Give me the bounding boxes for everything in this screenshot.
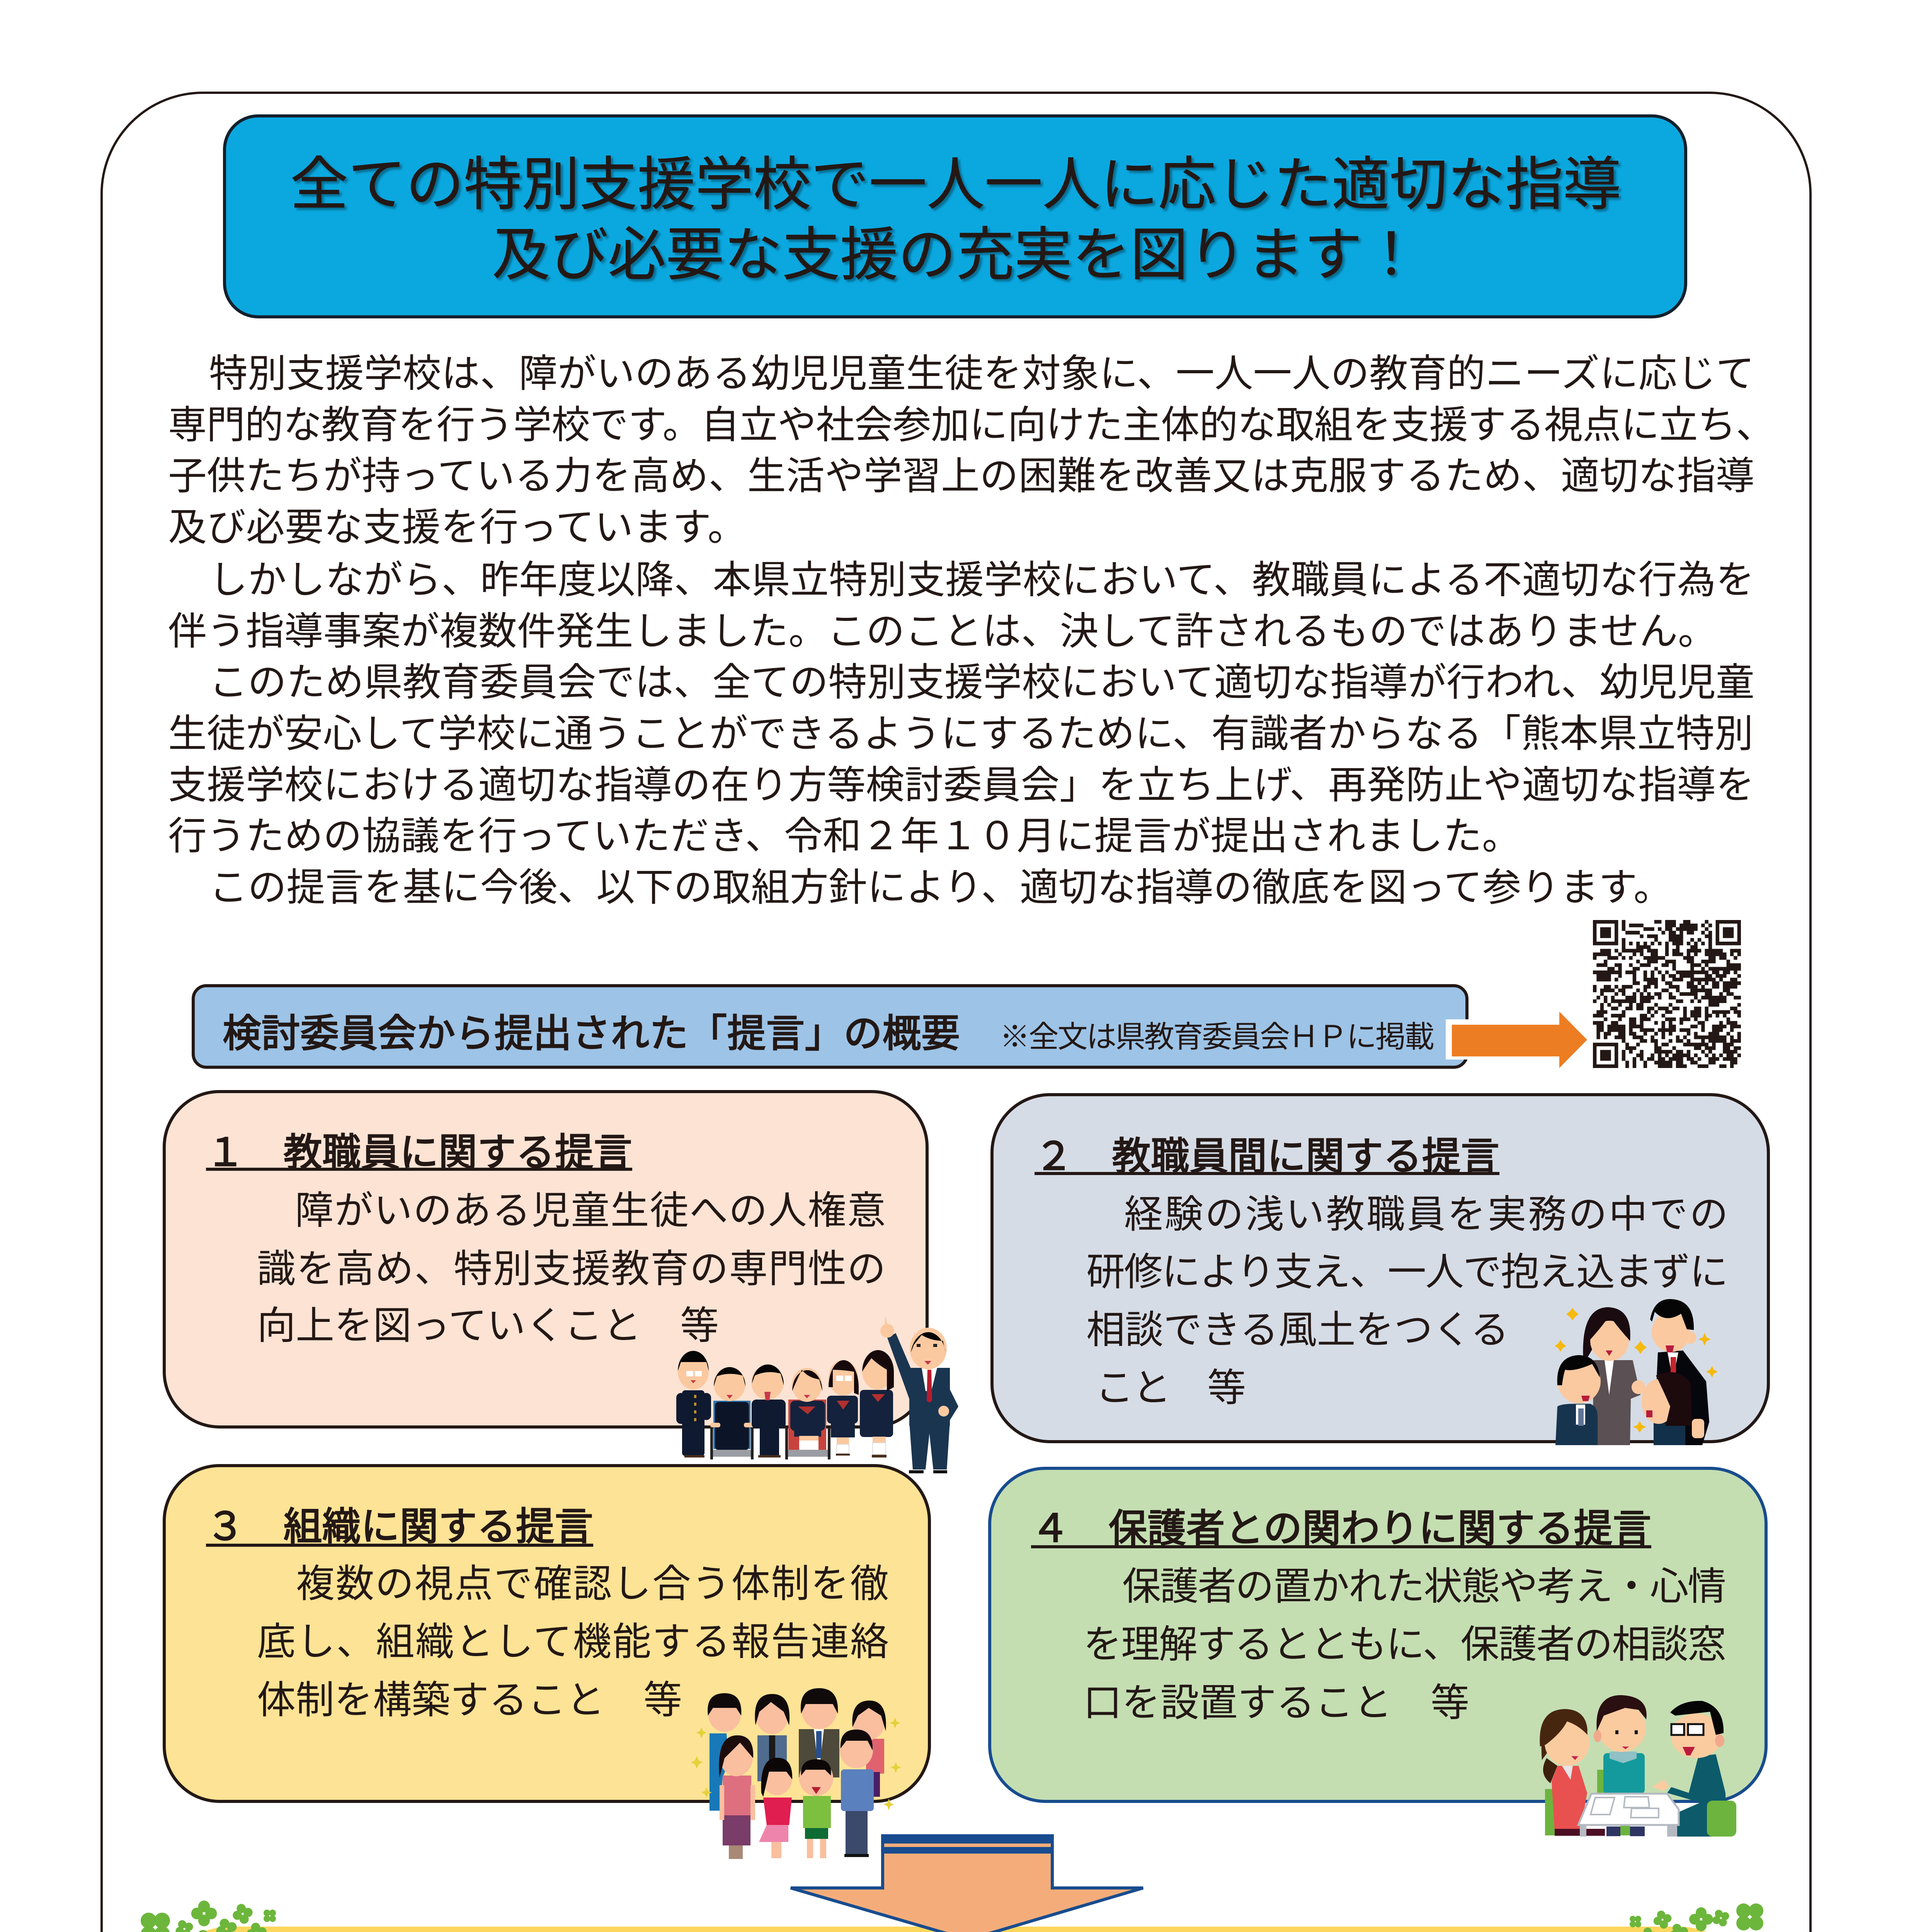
panel: proposal 1 staff	[164, 1092, 927, 1427]
intro text block: 子供たちが持っている力を高め、生活や学習上の困難を改善又は克服するため、適切な指導	[168, 454, 1754, 498]
intro text block	[168, 352, 1775, 909]
intro text block: しかしながら、昨年度以降、本県立特別支援学校において、教職員による不適切な行為を	[209, 558, 1754, 602]
panel: proposal 2 between staff: 研修により支え、一人で抱え込まずに	[1086, 1250, 1728, 1294]
panel: proposal 4 guardians: を理解するとともに、保護者の相談窓	[1083, 1623, 1726, 1666]
panel: proposal 4 guardians	[990, 1468, 1766, 1801]
intro text block: 行うための協議を行っていただき、令和２年１０月に提言が提出されました。	[168, 815, 1521, 858]
intro text block: 伴う指導事案が複数件発生しました。このことは、決して許されるものではありません。	[168, 610, 1717, 653]
QR code	[1593, 920, 1741, 1068]
icon: parent consultation	[1540, 1695, 1736, 1837]
panel: proposal 2 between staff: 相談できる風土をつくる	[1086, 1308, 1509, 1352]
panel: proposal 1 staff: 向上を図っていくこと 等	[257, 1304, 719, 1347]
panel: proposal 3 organization: ３ 組織に関する提言	[206, 1505, 593, 1548]
panel: proposal 4 guardians: ４ 保護者との関わりに関する提言	[1031, 1507, 1651, 1550]
icon: teachers talking	[1555, 1299, 1718, 1445]
panel: proposal 1 staff: １ 教職員に関する提言	[206, 1131, 632, 1174]
panel: proposal 4 guardians: 口を設置すること 等	[1083, 1681, 1469, 1725]
panel: proposal 1 staff: 識を高め、特別支援教育の専門性の	[257, 1247, 886, 1291]
panel: action policy	[150, 1927, 1760, 1932]
intro text block: 生徒が安心して学校に通うことができるようにするために、有識者からなる「熊本県立特別	[168, 712, 1753, 755]
icon: clovers top right	[1630, 1903, 1779, 1932]
panel: proposal 3 organization: 体制を構築すること 等	[257, 1679, 682, 1722]
panel: proposal 2 between staff: ２ 教職員間に関する提言	[1035, 1135, 1499, 1178]
title banner: 全ての特別支援学校で一人一人に応じた適切な指導	[290, 152, 1621, 217]
title banner: 及び必要な支援の充実を図ります！	[492, 222, 1420, 287]
arrow: proposals to action policy	[791, 1834, 1143, 1932]
intro text block: 専門的な教育を行う学校です。自立や社会参加に向けた主体的な取組を支援する視点に立ち、	[168, 403, 1775, 447]
icon: students in uniform and teacher	[676, 1316, 958, 1473]
panel: proposal 3 organization: 底し、組織として機能する報告連絡	[257, 1620, 889, 1663]
proposal summary bar: 検討委員会から提出された「提言」の概要	[223, 1012, 960, 1055]
icon: family group	[691, 1688, 901, 1859]
panel: proposal 2 between staff: 経験の浅い教職員を実務の中での	[1124, 1193, 1728, 1236]
panel: proposal 3 organization: 複数の視点で確認し合う体制を徹	[296, 1562, 889, 1605]
title banner	[225, 116, 1686, 317]
proposal summary bar	[193, 986, 1467, 1067]
intro text block: 特別支援学校は、障がいのある幼児児童生徒を対象に、一人一人の教育的ニーズに応じて	[209, 352, 1754, 395]
panel: proposal 1 staff: 障がいのある児童生徒への人権意	[295, 1189, 886, 1232]
intro text block: このため県教育委員会では、全ての特別支援学校において適切な指導が行われ、幼児児童	[209, 661, 1754, 704]
intro text block: 支援学校における適切な指導の在り方等検討委員会」を立ち上げ、再発防止や適切な指導を	[168, 764, 1754, 807]
intro text block: 及び必要な支援を行っています。	[168, 506, 746, 549]
panel: proposal 2 between staff	[992, 1095, 1768, 1442]
intro text block: この提言を基に今後、以下の取組方針により、適切な指導の徹底を図って参ります。	[209, 866, 1672, 909]
arrow to QR code	[1446, 1012, 1587, 1068]
icon: clovers top left	[126, 1898, 276, 1932]
panel: proposal 2 between staff: こと 等	[1095, 1366, 1246, 1410]
panel: proposal 3 organization	[164, 1466, 929, 1801]
proposal summary bar: ※全文は県教育委員会ＨＰに掲載	[1000, 1020, 1434, 1054]
panel: proposal 4 guardians: 保護者の置かれた状態や考え・心情	[1122, 1565, 1726, 1608]
